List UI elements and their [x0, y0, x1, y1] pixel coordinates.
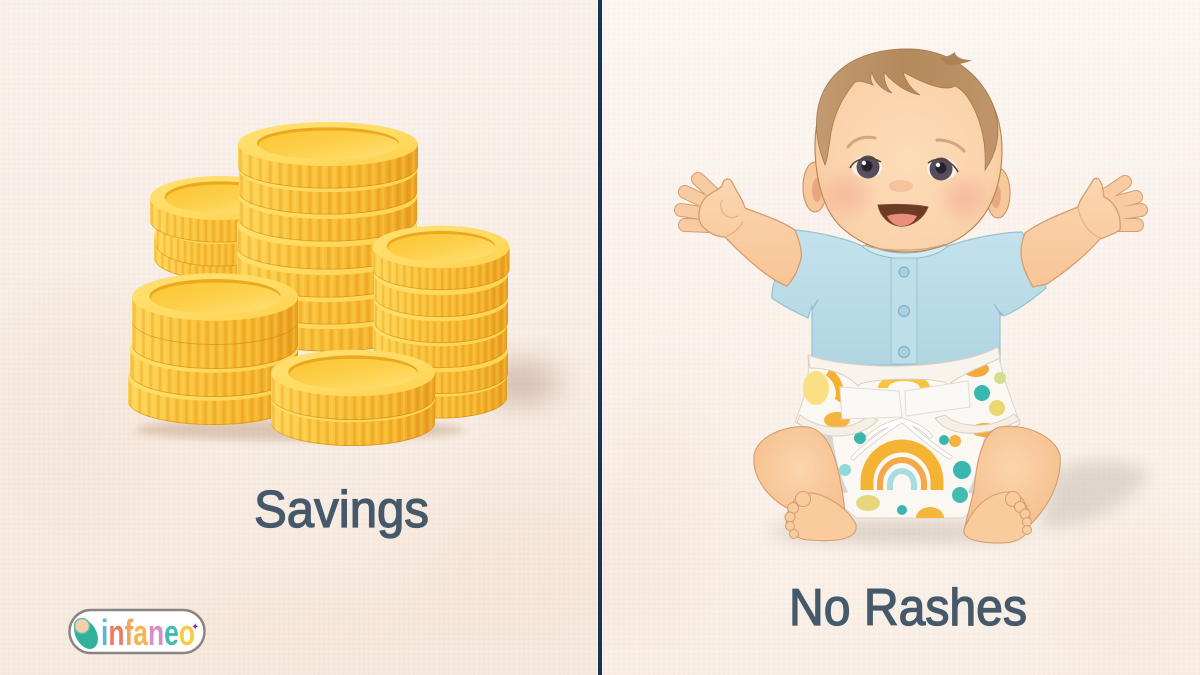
nose: [889, 180, 913, 192]
diaper leg cuffs: [815, 430, 1002, 497]
right leg and foot: [964, 426, 1060, 543]
panel: no rashes: [681, 49, 1150, 637]
right toes: [1006, 492, 1032, 534]
cheeks: [823, 177, 985, 216]
hair tuft: [940, 52, 972, 65]
face: [815, 49, 1002, 252]
heading: no rashes: No Rashes: [789, 579, 1027, 637]
mouth: [878, 204, 928, 226]
coin stack: front left: [128, 273, 298, 425]
left leg and foot: [754, 427, 856, 541]
coin stack: tall centre: [237, 122, 418, 352]
background: right panel: [602, 0, 1200, 675]
ground shadow under coins: [135, 419, 465, 441]
diaper print: [803, 361, 1006, 518]
coin stack: right: [372, 226, 510, 419]
head: [803, 49, 1010, 252]
ground shadow under baby: [770, 521, 1030, 543]
divider line: [597, 0, 603, 675]
logo wordmark: infaneo: [101, 612, 195, 653]
hair: [816, 49, 998, 170]
diaper rainbow: [867, 446, 937, 490]
background: left panel: [0, 0, 598, 675]
diaper waistband: [808, 347, 1000, 386]
right arm and hand: [1021, 178, 1141, 287]
heading: savings: Savings: [254, 481, 429, 539]
diaper: [795, 347, 1020, 518]
baby shadow: [1040, 460, 1150, 530]
eyes: [850, 156, 958, 180]
shirt: [772, 230, 1046, 365]
coin stack: front centre: [271, 350, 435, 446]
diaper drawstring: [853, 420, 950, 458]
icon: sparkle: ✦: [191, 622, 199, 633]
logo: infaneo: [69, 610, 205, 653]
left arm and hand: [681, 179, 801, 286]
eyebrows: [848, 137, 964, 151]
ears: [803, 162, 1010, 218]
illustration: baby: [681, 49, 1141, 543]
icon: swaddled baby: [69, 615, 103, 653]
shirt buttons: [898, 267, 910, 358]
panel: savings: [69, 122, 562, 653]
coin stack: back left: [150, 176, 290, 280]
coin shadow: [478, 359, 562, 407]
diaper tabs: [840, 387, 902, 419]
left toes: [785, 492, 810, 538]
chin crease: [865, 244, 945, 250]
